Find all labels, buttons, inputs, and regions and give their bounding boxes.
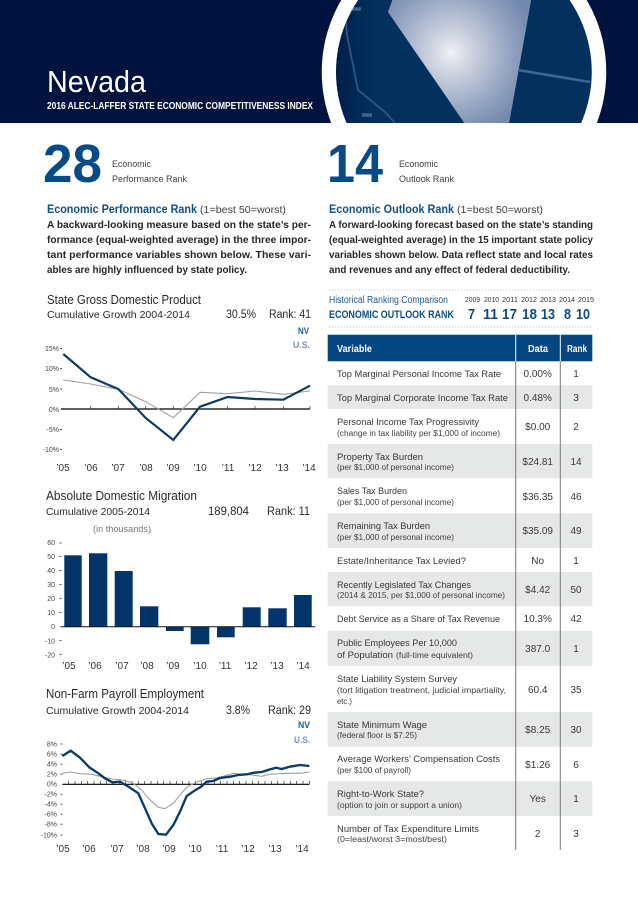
- line chart: ’09: [166, 463, 180, 474]
- bar chart: ’05: [62, 661, 76, 672]
- line chart: ’07: [111, 463, 125, 474]
- row: right to work: 1: [573, 794, 579, 805]
- big number: performance rank: 28: [43, 134, 102, 194]
- row: liability survey: (tort litigation treatment, judicial impartiality,: [337, 686, 506, 695]
- line chart: ’06: [82, 844, 96, 855]
- row: estate tax: Estate/Inheritance Tax Levied?: [337, 556, 466, 567]
- description text: [329, 219, 593, 276]
- bar chart: ’09: [166, 661, 180, 672]
- description text: variables shown below. Data reflect state and local rates: [329, 249, 593, 261]
- line chart: [41, 742, 309, 855]
- line chart: ’12: [248, 463, 262, 474]
- line chart: -5%: [47, 427, 59, 434]
- panel: economic outlook rank: [327, 134, 593, 276]
- row: property tax: 14: [570, 457, 582, 468]
- row: right to work: [328, 781, 592, 816]
- line chart: 10%: [45, 366, 59, 373]
- line chart: ’08: [139, 463, 153, 474]
- line chart: ’14: [302, 463, 316, 474]
- chart heading: Cumulative Growth 2004-2014: [47, 309, 190, 321]
- row: public employees: 1: [573, 644, 579, 655]
- row: recent tax changes: Recently Legislated Tax Changes: [337, 580, 471, 591]
- row: minimum wage: State Minimum Wage: [337, 720, 427, 731]
- line chart: -8%: [45, 822, 57, 828]
- row: debt service: Debt Service as a Share of Tax Revenue: [337, 614, 500, 625]
- legend: [293, 326, 310, 350]
- row: progressivity: 2: [573, 422, 579, 433]
- bar chart: ’11: [219, 661, 232, 672]
- row: property tax: Property Tax Burden: [337, 452, 423, 463]
- chart heading: Cumulative Growth 2004-2014: [46, 705, 189, 717]
- bar chart: 30: [47, 582, 55, 589]
- row: recent tax changes: [328, 572, 592, 606]
- row: remaining tax: $35.09: [522, 526, 553, 537]
- chart heading: State Gross Domestic Product: [47, 293, 201, 307]
- historical ranks: 10: [576, 307, 590, 323]
- historical labels: Historical Ranking Comparison: [329, 295, 448, 306]
- row: liability survey: [337, 674, 582, 706]
- row: liability survey: 60.4: [528, 685, 548, 696]
- years: 2013: [540, 295, 556, 304]
- row: right to work: Yes: [530, 794, 546, 805]
- heading: Economic Outlook Rank: [329, 204, 455, 216]
- row: minimum wage: [328, 712, 592, 747]
- bar chart: 20: [47, 596, 55, 603]
- row: liability survey: etc.): [337, 697, 352, 706]
- bar chart: -10: [45, 638, 55, 646]
- row: minimum wage: $8.25: [525, 725, 551, 736]
- line chart: 15%: [45, 346, 59, 353]
- row: public employees: [328, 631, 592, 666]
- bar chart: 10: [47, 610, 55, 617]
- row: public employees: (full-time equivalent): [396, 651, 473, 660]
- description text: formance (equal-weighted average) in the three impor-: [47, 234, 311, 246]
- description text: ables are highly influenced by state policy.: [47, 264, 247, 276]
- historical labels: ECONOMIC OUTLOOK RANK: [329, 309, 454, 321]
- years: 2015: [578, 295, 594, 304]
- historical ranks: 7: [468, 307, 475, 323]
- line chart: ’08: [136, 844, 150, 855]
- heading: [47, 204, 286, 216]
- historical ranks: 13: [541, 307, 555, 323]
- line chart: 8%: [47, 742, 57, 748]
- row: expenditure limits: Number of Tax Expenditure Limits: [337, 824, 479, 835]
- line chart: -4%: [45, 802, 57, 808]
- row: sales tax: $36.35: [522, 492, 553, 503]
- historical ranks: [468, 307, 590, 323]
- row: expenditure limits: [337, 824, 579, 844]
- legend: NV: [298, 720, 310, 730]
- description text: [47, 219, 311, 276]
- row: expenditure limits: (0=least/worst 3=most/best): [337, 835, 447, 844]
- row: workers compensation: 6: [573, 760, 579, 771]
- panel: non-farm payroll employment: [41, 687, 311, 855]
- line chart: ’05: [56, 463, 70, 474]
- row: property tax: $24.81: [522, 457, 553, 468]
- panel: absolute domestic migration: [45, 489, 315, 672]
- row: progressivity: (change in tax liability per $1,000 of income): [337, 429, 500, 438]
- chart heading: (in thousands): [93, 524, 151, 535]
- line chart: 0%: [47, 782, 57, 788]
- line chart: ’14: [295, 844, 309, 855]
- row: sales tax: 46: [570, 492, 582, 503]
- row: public employees: 387.0: [525, 644, 551, 655]
- panel: variables table: [328, 335, 592, 850]
- description text: (equal-weighted average) in the 15 important state policy: [329, 234, 593, 246]
- row: debt service: 10.3%: [524, 614, 552, 625]
- legend: U.S.: [293, 340, 310, 350]
- bar chart: ’13: [270, 661, 284, 672]
- bar chart: ’12: [244, 661, 258, 672]
- row: expenditure limits: 3: [573, 829, 579, 840]
- bar chart: [45, 540, 315, 672]
- row: property tax: [328, 444, 592, 478]
- chart heading: [47, 293, 311, 321]
- years: 2010: [484, 295, 499, 304]
- description text: and revenues and any effect of federal deductibility.: [329, 264, 570, 276]
- years: 2009: [465, 295, 480, 304]
- table header: Variable: [337, 344, 372, 355]
- historical ranks: 11: [483, 307, 498, 323]
- description text: A backward-looking measure based on the state’s per-: [47, 219, 311, 231]
- line chart: ’05: [56, 844, 70, 855]
- historical ranks: 18: [522, 307, 537, 323]
- years: 2012: [521, 295, 537, 304]
- row: debt service: 42: [570, 614, 582, 625]
- bar chart: ’08: [140, 661, 154, 672]
- header banner: [0, 0, 638, 123]
- historical ranks: 8: [564, 307, 571, 323]
- bar chart: 40: [47, 568, 55, 575]
- bar chart: -20: [45, 652, 55, 660]
- row: personal income tax rate: 0.00%: [524, 369, 552, 380]
- years: 2011: [502, 295, 518, 304]
- line chart: 2%: [47, 772, 57, 778]
- row: workers compensation: Average Workers’ Compensation Costs: [337, 754, 500, 765]
- chart heading: [46, 687, 311, 717]
- row: liability survey: 35: [570, 685, 582, 696]
- row: recent tax changes: (2014 & 2015, per $1,000 of personal income): [337, 591, 505, 600]
- row: estate tax: [337, 556, 579, 567]
- row: sales tax: Sales Tax Burden: [337, 486, 407, 497]
- row: expenditure limits: 2: [535, 829, 541, 840]
- chart heading: Cumulative 2005-2014: [46, 506, 150, 518]
- heading: (1=best 50=worst): [200, 205, 286, 216]
- table header: [328, 335, 592, 361]
- row: sales tax: (per $1,000 of personal income): [337, 498, 454, 507]
- row: estate tax: 1: [573, 556, 579, 567]
- heading: (1=best 50=worst): [457, 205, 543, 216]
- row: property tax: (per $1,000 of personal income): [337, 463, 454, 472]
- icon: circular map of Nevada: [322, 0, 606, 123]
- chart heading: 30.5%: [226, 309, 256, 321]
- chart heading: [46, 489, 310, 535]
- row: workers compensation: [337, 754, 579, 775]
- row: remaining tax: Remaining Tax Burden: [337, 521, 430, 532]
- chart heading: Rank: 29: [268, 705, 311, 717]
- chart heading: 3.8%: [226, 705, 250, 717]
- row: remaining tax: 49: [570, 526, 582, 537]
- line chart: ’07: [110, 844, 124, 855]
- bar chart: ’10: [193, 661, 207, 672]
- row: workers compensation: (per $100 of payroll): [337, 766, 411, 775]
- legend: U.S.: [294, 735, 310, 745]
- chart heading: 189,804: [208, 506, 250, 518]
- bar chart: 60: [47, 540, 55, 547]
- line chart: 0%: [49, 407, 59, 414]
- line chart: -2%: [45, 792, 57, 798]
- heading: Economic Performance Rank: [47, 204, 198, 216]
- line chart: -10%: [43, 447, 59, 454]
- table header: Rank: [567, 344, 587, 355]
- bar chart: ’14: [296, 661, 310, 672]
- line chart: ’11: [216, 844, 229, 855]
- panel: economic performance rank: [43, 134, 311, 276]
- row: progressivity: $0.00: [525, 422, 551, 433]
- row: corporate income tax rate: Top Marginal Corporate Income Tax Rate: [337, 393, 508, 404]
- bar chart: ’07: [115, 661, 129, 672]
- line chart: ’13: [275, 463, 289, 474]
- row: estate tax: No: [531, 556, 545, 567]
- bar chart: 0: [51, 624, 55, 631]
- bar chart: 50: [47, 554, 55, 561]
- row: minimum wage: 30: [570, 725, 582, 736]
- row: minimum wage: (federal floor is $7.25): [337, 731, 417, 740]
- row: corporate income tax rate: 3: [573, 393, 579, 404]
- row: public employees: Public Employees Per 10,000: [337, 638, 457, 649]
- historical ranks: 17: [502, 307, 517, 323]
- row: right to work: (option to join or support a union): [337, 801, 462, 810]
- line chart: ’13: [268, 844, 282, 855]
- line chart: -6%: [45, 812, 57, 818]
- rank caption: Economic: [112, 159, 151, 170]
- row: recent tax changes: 50: [570, 585, 582, 596]
- years: [465, 295, 594, 304]
- description text: tant performance variables shown below. These vari-: [47, 249, 311, 261]
- row: corporate income tax rate: [328, 385, 592, 409]
- row: progressivity: [337, 417, 579, 438]
- line chart: ’10: [188, 844, 202, 855]
- rank caption: Economic: [399, 159, 438, 170]
- row: remaining tax: (per $1,000 of personal income): [337, 533, 454, 542]
- row: remaining tax: [328, 513, 592, 548]
- panel: state gross domestic product: [43, 293, 316, 474]
- line chart: -10%: [41, 832, 57, 840]
- line chart: 5%: [49, 387, 59, 394]
- table header: Data: [528, 344, 548, 355]
- chart heading: Absolute Domestic Migration: [46, 489, 197, 503]
- row: recent tax changes: $4.42: [525, 585, 551, 596]
- row: public employees: of Population: [337, 650, 393, 661]
- line chart: [43, 346, 316, 474]
- legend: [294, 720, 310, 745]
- legend: NV: [298, 326, 309, 336]
- rank caption: [399, 159, 454, 185]
- row: workers compensation: $1.26: [525, 760, 551, 771]
- chart heading: Non-Farm Payroll Employment: [46, 687, 204, 701]
- historical labels: [329, 295, 454, 321]
- chart heading: Rank: 11: [267, 506, 310, 518]
- title: Nevada: [47, 64, 147, 99]
- bar chart: ’06: [88, 661, 102, 672]
- line chart: ’09: [162, 844, 176, 855]
- big number: outlook rank: 14: [327, 134, 383, 194]
- line chart: 4%: [47, 762, 57, 768]
- chart heading: Rank: 41: [269, 309, 311, 321]
- line chart: ’12: [241, 844, 255, 855]
- row: corporate income tax rate: 0.48%: [524, 393, 552, 404]
- line chart: ’11: [222, 463, 235, 474]
- row: personal income tax rate: Top Marginal Personal Income Tax Rate: [337, 369, 501, 380]
- row: progressivity: Personal Income Tax Progressivity: [337, 417, 479, 428]
- years: 2014: [559, 295, 575, 304]
- line chart: ’06: [84, 463, 98, 474]
- row: liability survey: State Liability System Survey: [337, 674, 457, 685]
- panel: historical ranking comparison: [329, 290, 594, 327]
- row: sales tax: [337, 486, 582, 507]
- row: right to work: Right-to-Work State?: [337, 789, 424, 800]
- rank caption: [112, 159, 187, 185]
- rank caption: Performance Rank: [112, 174, 187, 185]
- line chart: ’10: [193, 463, 207, 474]
- rank caption: Outlook Rank: [399, 174, 454, 185]
- heading: [329, 204, 543, 216]
- line chart: 6%: [47, 752, 57, 758]
- row: personal income tax rate: 1: [573, 369, 579, 380]
- subtitle: 2016 ALEC-LAFFER STATE ECONOMIC COMPETITIVENESS INDEX: [47, 101, 313, 112]
- description text: A forward-looking forecast based on the state’s standing: [329, 219, 593, 231]
